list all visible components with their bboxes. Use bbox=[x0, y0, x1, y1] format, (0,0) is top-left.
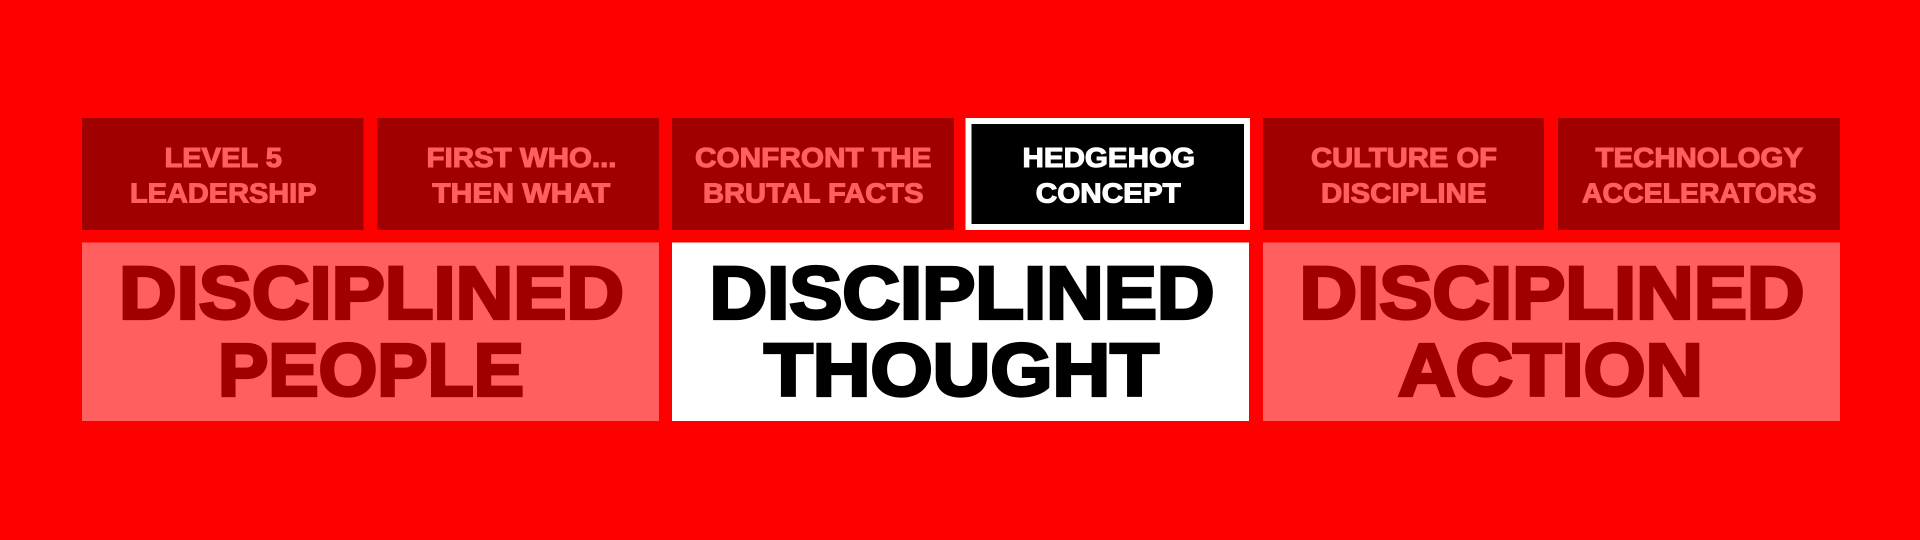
label: first who then what bbox=[426, 142, 616, 208]
label: culture of discipline: DISCIPLINE bbox=[1321, 177, 1486, 208]
panel: disciplined action bbox=[1263, 242, 1840, 421]
label: first who then what: THEN WHAT bbox=[432, 177, 610, 208]
panel: first who then what bbox=[377, 118, 659, 230]
panel: disciplined people bbox=[82, 242, 659, 421]
panel: culture of discipline bbox=[1263, 118, 1544, 230]
panel: level 5 leadership bbox=[82, 118, 364, 230]
label: culture of discipline bbox=[1311, 142, 1497, 208]
label: technology accelerators bbox=[1582, 142, 1816, 208]
label: hedgehog concept: HEDGEHOG bbox=[1022, 142, 1195, 173]
label: level 5 leadership: LEADERSHIP bbox=[130, 177, 316, 208]
label: confront the brutal facts: CONFRONT THE bbox=[695, 142, 932, 173]
label: confront the brutal facts bbox=[695, 142, 932, 208]
heading: disciplined thought: DISCIPLINED bbox=[710, 252, 1214, 334]
panel: disciplined thought bbox=[672, 242, 1249, 421]
heading: disciplined action: ACTION bbox=[1398, 328, 1703, 412]
label: technology accelerators: ACCELERATORS bbox=[1582, 177, 1816, 208]
heading: disciplined action: DISCIPLINED bbox=[1300, 252, 1804, 334]
heading: disciplined people bbox=[119, 252, 624, 412]
heading: disciplined thought: THOUGHT bbox=[764, 328, 1159, 412]
label: hedgehog concept: CONCEPT bbox=[1036, 177, 1181, 208]
label: first who then what: FIRST WHO... bbox=[426, 142, 616, 173]
label: hedgehog concept bbox=[1022, 142, 1195, 208]
heading: disciplined thought bbox=[710, 252, 1214, 412]
label: culture of discipline: CULTURE OF bbox=[1311, 142, 1497, 173]
label: technology accelerators: TECHNOLOGY bbox=[1596, 142, 1803, 173]
panel: technology accelerators bbox=[1558, 118, 1840, 230]
label: level 5 leadership bbox=[130, 142, 316, 208]
label: confront the brutal facts: BRUTAL FACTS bbox=[703, 177, 924, 208]
panel: hedgehog concept bbox=[968, 121, 1247, 227]
panel: confront the brutal facts bbox=[672, 118, 954, 230]
heading: disciplined action bbox=[1300, 252, 1804, 412]
heading: disciplined people: DISCIPLINED bbox=[119, 252, 624, 334]
label: level 5 leadership: LEVEL 5 bbox=[164, 142, 282, 173]
heading: disciplined people: PEOPLE bbox=[218, 328, 524, 412]
